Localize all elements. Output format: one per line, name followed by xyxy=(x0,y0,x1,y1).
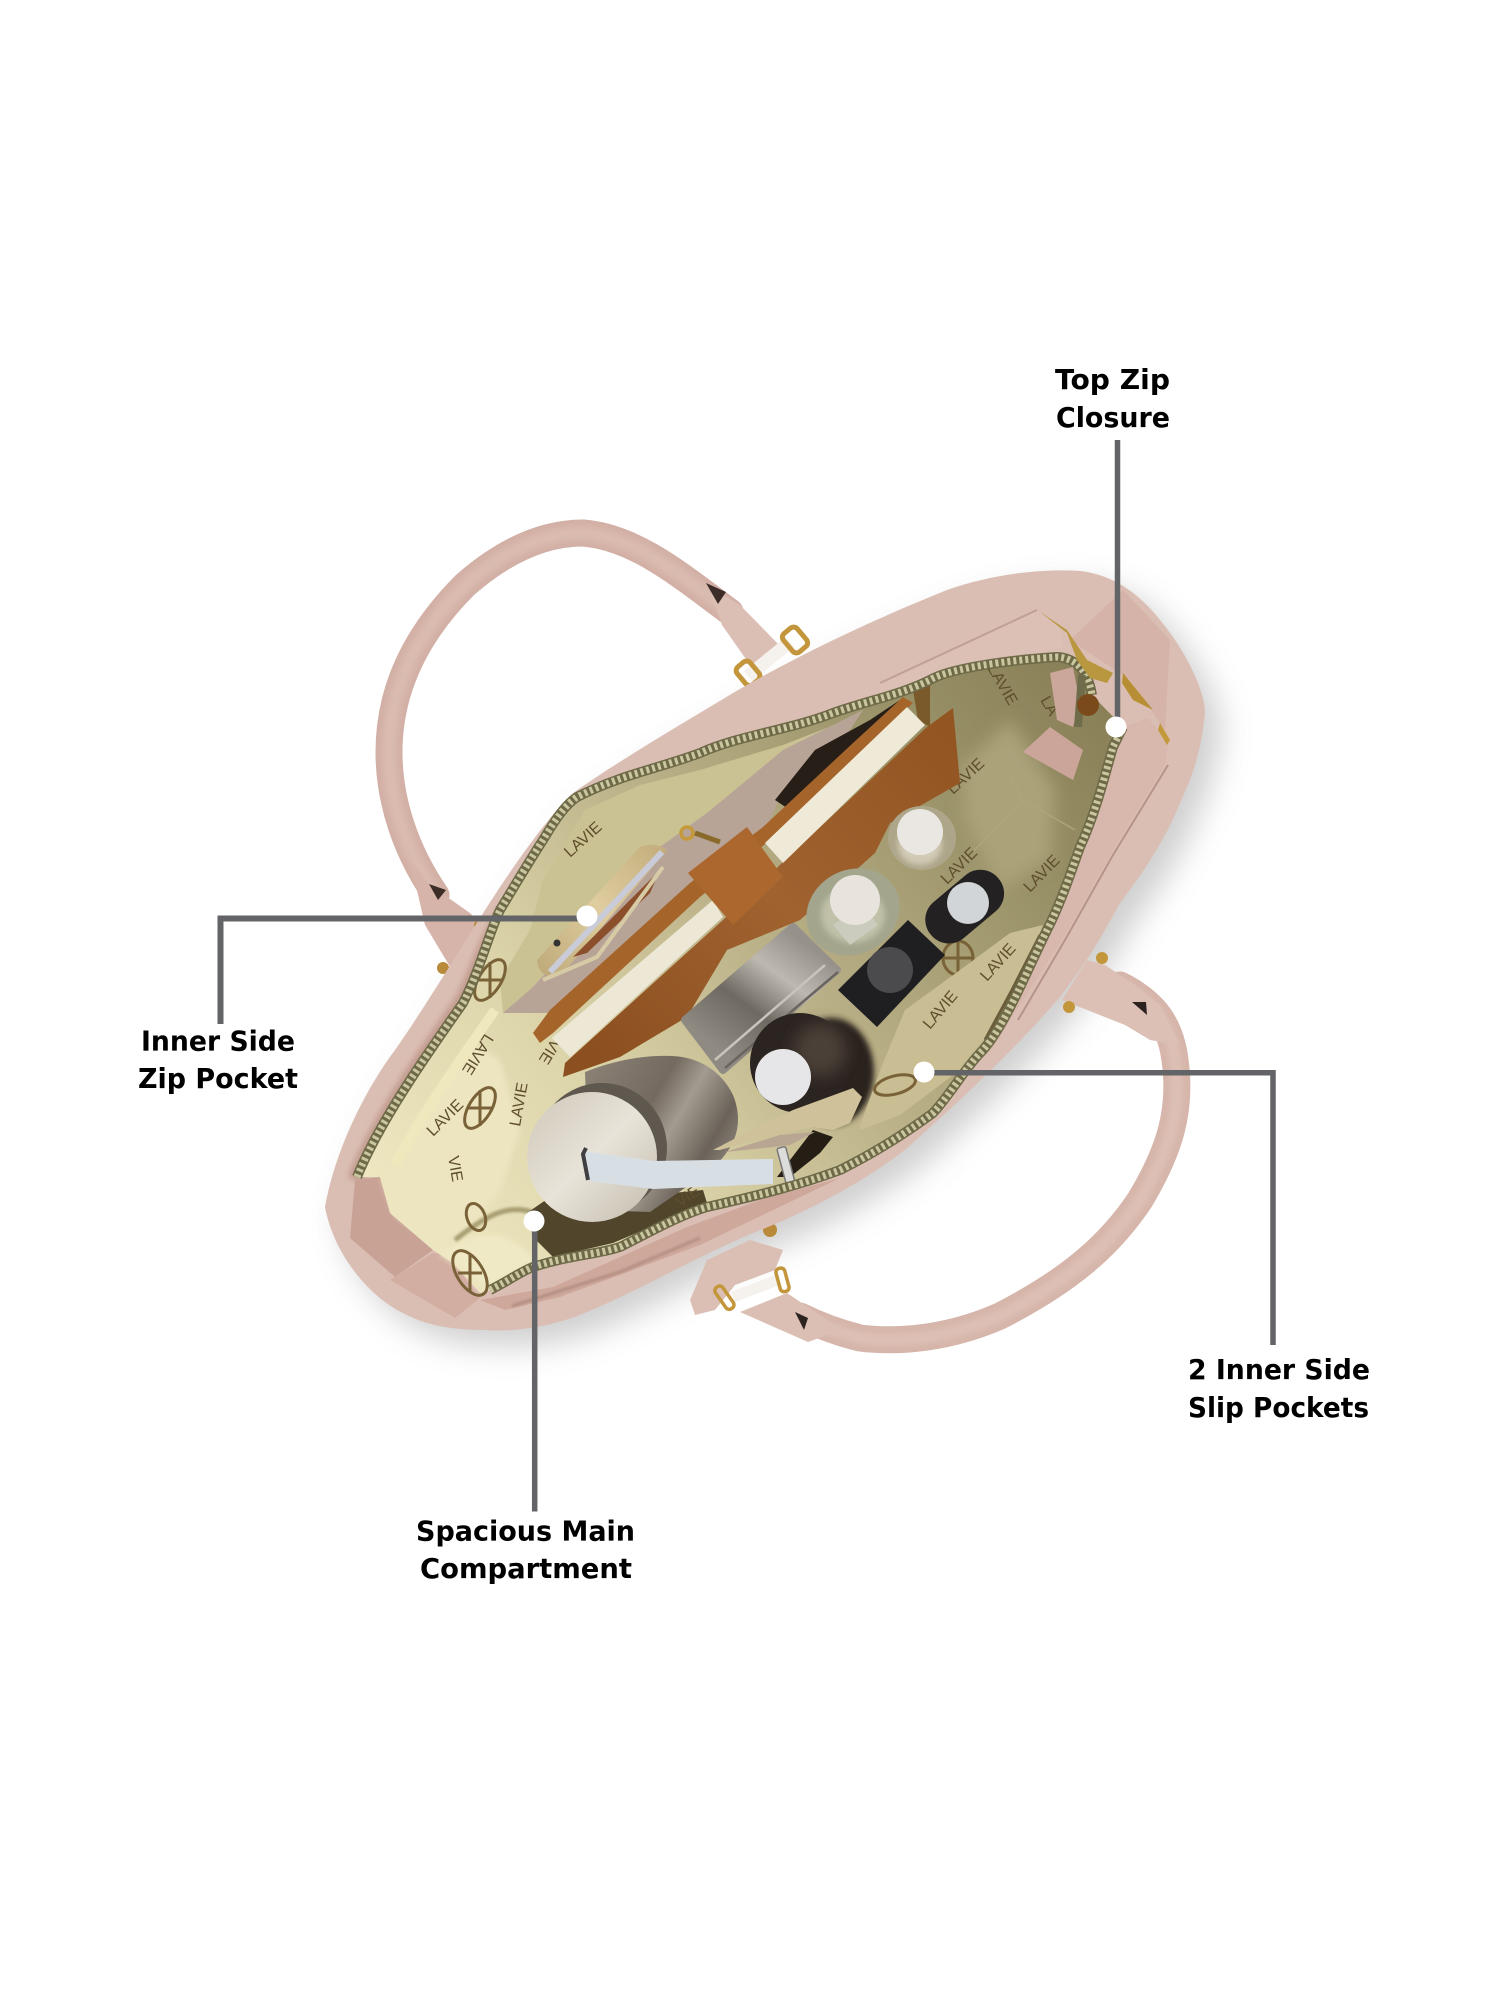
stainless steel flask xyxy=(527,1056,773,1222)
label: Closure xyxy=(1056,401,1170,434)
label: Inner Side xyxy=(141,1024,295,1058)
label xyxy=(1188,1353,1370,1424)
lining monograms and LAVIE print: LAVIE xyxy=(1021,852,1064,896)
leader line xyxy=(1115,440,1120,725)
label xyxy=(138,1024,298,1095)
label: Top Zip xyxy=(1055,363,1170,396)
flask strap xyxy=(583,1151,773,1189)
callout: inner side zip pocket xyxy=(138,906,598,1095)
callout: 2 inner side slip pockets xyxy=(914,1062,1370,1424)
lining monograms and LAVIE print: LAVIE xyxy=(984,662,1020,708)
brown notebook xyxy=(533,697,960,1077)
lining monograms and LAVIE print: VIE xyxy=(673,1183,703,1211)
leader line xyxy=(220,918,585,1024)
lower left cream folds xyxy=(382,1040,520,1240)
black lipstick bottle xyxy=(916,860,1013,953)
zip pull and gold tape ends xyxy=(1023,612,1170,780)
label xyxy=(1055,363,1170,434)
slip pocket: LAVIE xyxy=(977,940,1020,985)
lining monograms and LAVIE print: LA xyxy=(1037,694,1061,719)
label: Compartment xyxy=(420,1552,632,1585)
top zipper xyxy=(357,657,1092,1177)
silver tin xyxy=(685,927,838,1070)
lining monograms and LAVIE print: VIE xyxy=(535,1036,563,1067)
slip pocket xyxy=(860,925,1043,1130)
bottom zipper xyxy=(490,727,1123,1290)
lining monograms and LAVIE print: LAVIE xyxy=(458,1031,496,1077)
label xyxy=(416,1514,635,1585)
zip pull on pocket xyxy=(681,827,720,842)
handbag photo illustration xyxy=(325,533,1221,1346)
lining monograms and LAVIE print: LAVIE xyxy=(507,1081,532,1128)
bottom handle xyxy=(690,952,1180,1342)
label: 2 Inner Side xyxy=(1188,1353,1370,1386)
callout: spacious main compartment xyxy=(416,1210,635,1585)
notebook strap xyxy=(688,827,783,925)
label: Spacious Main xyxy=(416,1514,635,1548)
lining monograms and LAVIE print: LAVIE xyxy=(424,1097,467,1140)
black square box xyxy=(838,920,945,1027)
slip pocket: LAVIE xyxy=(920,988,961,1033)
interior lining xyxy=(357,657,1123,1293)
tan pouch flap and buckle xyxy=(713,1088,862,1183)
lining monograms and LAVIE print: LAVIE xyxy=(938,845,981,888)
label: Zip Pocket xyxy=(138,1062,298,1095)
perfume bottles xyxy=(790,806,956,972)
rim shading and pink panels xyxy=(350,590,1170,1318)
marker dot xyxy=(576,906,598,926)
dark glass bottle xyxy=(750,1013,850,1113)
dark floor under flask xyxy=(527,1190,707,1257)
marker dot xyxy=(914,1062,934,1082)
inner zip pocket and pink pouch xyxy=(503,685,930,1013)
label: Slip Pockets xyxy=(1188,1391,1369,1424)
bag drop shadow xyxy=(341,586,1221,1346)
upper right folds xyxy=(960,720,1055,890)
marker dot xyxy=(1106,716,1126,738)
lining monograms and LAVIE print: VIE xyxy=(444,1155,465,1183)
phone in pocket xyxy=(537,845,667,980)
bag body xyxy=(325,570,1205,1330)
lining monograms and LAVIE print: LAVIE xyxy=(944,755,988,798)
lining monograms and LAVIE print xyxy=(424,662,1064,1301)
leader line xyxy=(926,1073,1273,1345)
top handle xyxy=(389,533,810,975)
marker dot xyxy=(524,1210,544,1232)
leader line xyxy=(532,1222,537,1512)
callout: top zip closure xyxy=(1055,363,1170,738)
upper pocket lining xyxy=(500,715,860,1013)
lining monograms and LAVIE print: LAVIE xyxy=(561,819,606,861)
